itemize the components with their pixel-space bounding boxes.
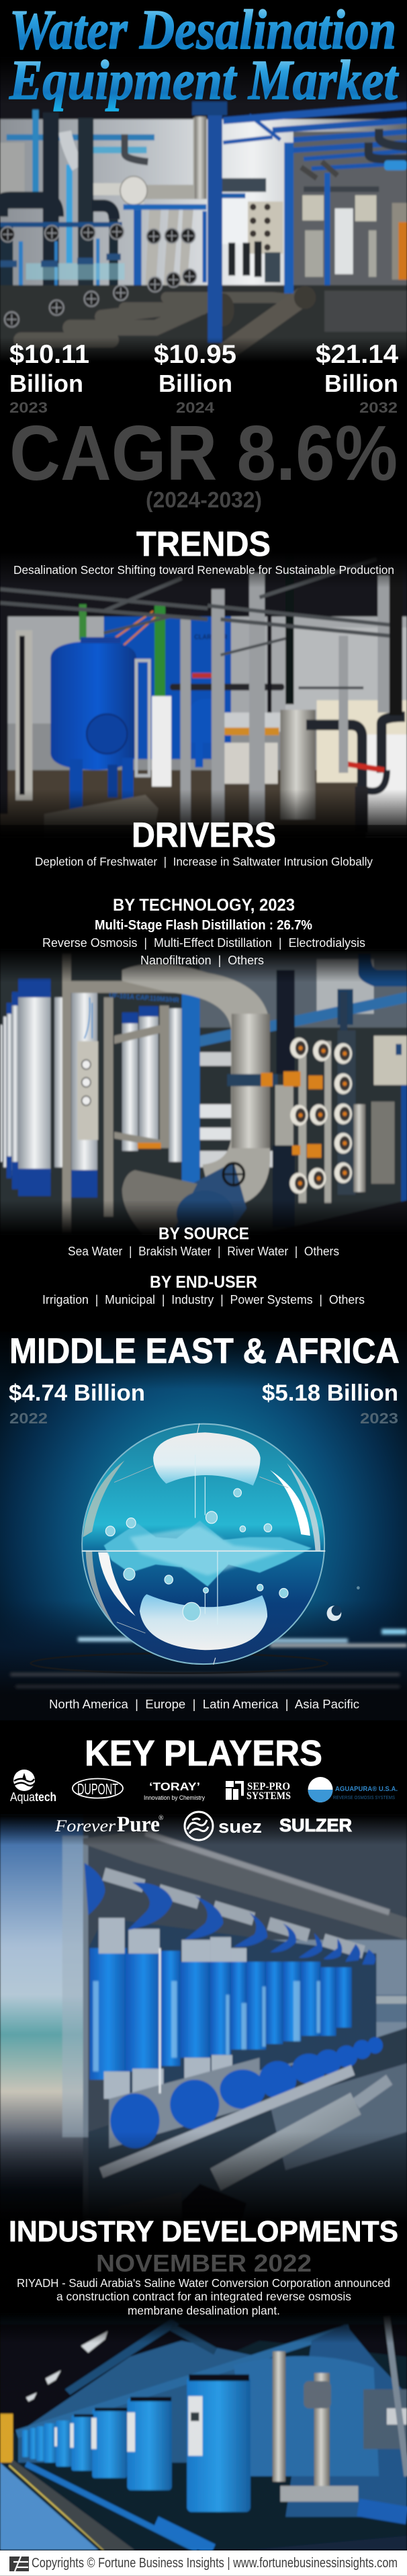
market size 2032	[316, 340, 398, 416]
logo: Aquatech: Aqua	[10, 1790, 36, 1804]
region value 2022: 2022	[9, 1410, 48, 1427]
logo: Forever Pure: ®	[159, 1815, 164, 1822]
photo: blue pressure tank and clarifier: CLARIFIER	[194, 634, 228, 641]
other regions: North America | Europe | Latin America | Asia Pacific	[49, 1698, 359, 1711]
region value 2022: $4.74 Billion	[9, 1380, 145, 1406]
logo: Toray	[144, 1780, 205, 1801]
development text: a construction contract for an integrated reverse osmosis	[56, 2290, 351, 2303]
logo: Sep-Pro Systems: SYSTEMS	[246, 1790, 291, 1802]
logo: DuPont	[73, 1778, 123, 1798]
by end-user section: BY END-USER	[150, 1273, 257, 1292]
drivers text: Depletion of Freshwater | Increase in Saltwater Intrusion Globally	[35, 855, 373, 868]
logo: Aguapura	[308, 1777, 398, 1802]
logo: Suez	[185, 1812, 262, 1840]
photo: membrane columns and silver elbow pipe: UF-101A CAP.110M3/HR	[109, 992, 179, 1005]
market size 2023: $10.11	[9, 340, 89, 369]
logo: Aquatech: tech	[35, 1790, 56, 1804]
logo: Forever Pure: Forever	[54, 1817, 116, 1835]
title	[9, 0, 399, 112]
industry developments heading: INDUSTRY DEVELOPMENTS	[9, 2215, 398, 2248]
logo: Toray: Innovation by Chemistry	[144, 1794, 205, 1801]
by end-user section	[42, 1273, 365, 1306]
market size 2024	[154, 340, 236, 416]
logo: Sep-Pro Systems	[226, 1781, 291, 1802]
region value 2023	[262, 1380, 398, 1427]
photo: membrane columns and silver elbow pipe	[0, 950, 407, 1237]
photo: blue pressure tank and clarifier	[0, 552, 407, 837]
by source section: Sea Water | Brakish Water | River Water | Others	[68, 1245, 339, 1258]
CAGR figure: (2024-2032)	[146, 487, 262, 512]
logo: Sulzer: SULZER	[279, 1815, 352, 1835]
photo: water sphere	[0, 1326, 407, 1720]
logo: Aguapura: AGUAPURA® U.S.A.	[335, 1786, 398, 1793]
logo: Suez: suez	[218, 1817, 262, 1837]
key players heading: KEY PLAYERS	[85, 1733, 322, 1774]
photo: blue filter cylinders	[0, 1815, 407, 2255]
logo: Aquatech	[10, 1770, 56, 1804]
market size 2032: Billion	[324, 370, 398, 397]
market size 2023: 2023	[9, 399, 48, 416]
photo: desalination plant with blue steel frame	[0, 58, 407, 362]
region value 2022	[9, 1380, 145, 1427]
development text: membrane desalination plant.	[128, 2304, 280, 2317]
by end-user section: Irrigation | Municipal | Industry | Power Systems | Others	[42, 1293, 365, 1306]
market size 2024: 2024	[176, 399, 215, 416]
by technology section	[42, 896, 365, 967]
logo: Forever Pure: Pure	[117, 1813, 160, 1837]
by source section	[68, 1224, 339, 1258]
region value 2023: 2023	[360, 1410, 398, 1427]
by technology section: Reverse Osmosis | Multi-Effect Distillation | Electrodialysis	[42, 936, 365, 950]
logo: Forever Pure	[54, 1813, 164, 1837]
drivers heading: DRIVERS	[132, 816, 276, 855]
trends heading: TRENDS	[136, 525, 271, 564]
logo: Sep-Pro Systems: SEP-PRO	[247, 1781, 290, 1792]
market size 2023: Billion	[9, 370, 83, 397]
by technology section: Multi-Stage Flash Distillation : 26.7%	[95, 918, 312, 933]
development text: RIYADH - Saudi Arabia's Saline Water Conversion Corporation announced	[17, 2276, 390, 2290]
market size 2024: $10.95	[154, 340, 236, 369]
logo: DuPont: DUPONT	[77, 1780, 118, 1798]
by source section: BY SOURCE	[159, 1224, 249, 1243]
region value 2023: $5.18 Billion	[262, 1380, 398, 1406]
market size 2032: $21.14	[316, 340, 398, 369]
market size 2032: 2032	[359, 399, 398, 416]
by technology section: BY TECHNOLOGY, 2023	[113, 896, 295, 915]
market size 2024: Billion	[159, 370, 232, 397]
logo: Toray: ‘TORAY’	[149, 1780, 200, 1793]
by technology section: Nanofiltration | Others	[140, 954, 264, 967]
development text	[17, 2276, 390, 2317]
footer	[0, 2550, 407, 2576]
trends text: Desalination Sector Shifting toward Renewable for Sustainable Production	[13, 563, 394, 577]
logo: Aguapura: REVERSE OSMOSIS SYSTEMS	[333, 1796, 395, 1800]
photo: blue tanks in a row	[0, 2313, 407, 2550]
market size 2023	[9, 340, 89, 416]
development date: NOVEMBER 2022	[96, 2249, 312, 2277]
